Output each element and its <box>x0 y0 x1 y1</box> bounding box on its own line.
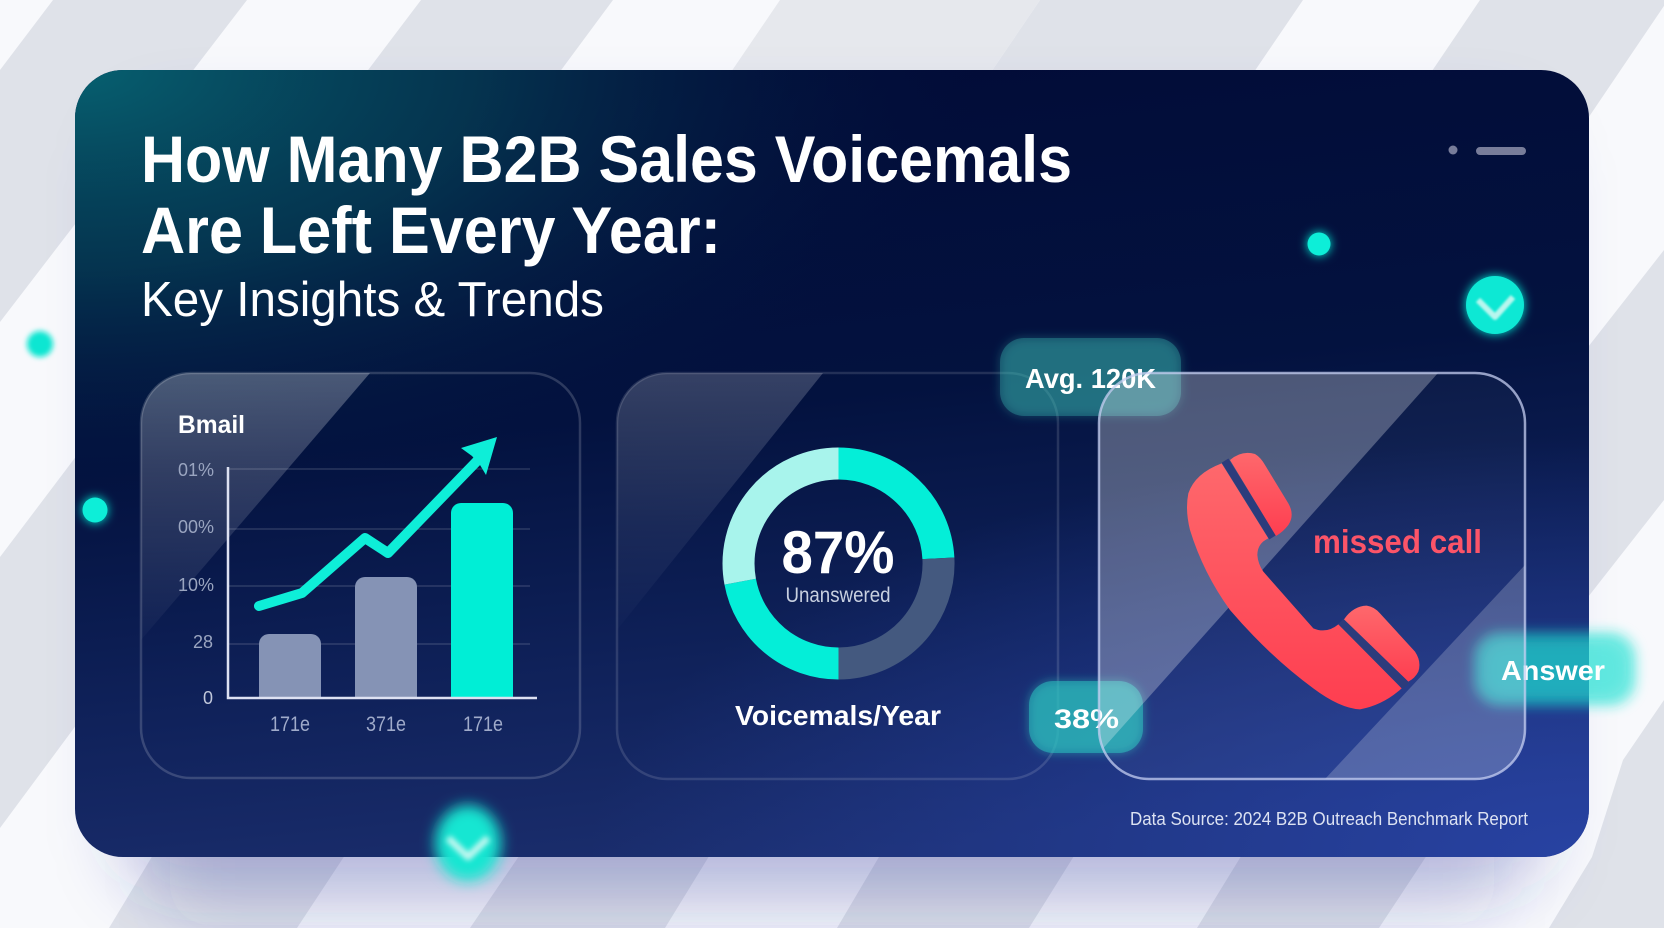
x axis labels: 371e <box>366 713 406 736</box>
panel: bar chart <box>141 373 580 778</box>
x axis labels: 171e <box>463 713 503 736</box>
glowing dot: left inside card <box>82 498 108 522</box>
y axis labels <box>178 460 214 708</box>
donut chart <box>739 463 939 664</box>
title: Are Left Every Year: <box>141 193 721 267</box>
panel caption: Voicemals/Year <box>735 700 941 731</box>
icon: glowing check badge bottom <box>435 805 501 881</box>
subtitle: Key Insights & Trends <box>141 273 604 327</box>
callout: 38 percent: 38% <box>1054 704 1119 734</box>
icon: glowing check badge upper right <box>1466 276 1524 334</box>
callout: 38 percent <box>1029 681 1143 753</box>
y axis labels: 10% <box>178 575 214 595</box>
glowing dot: upper right <box>1308 232 1330 256</box>
icon: red phone handset <box>1187 453 1419 709</box>
donut value: 87% <box>782 519 894 586</box>
y axis labels: 00% <box>178 517 214 537</box>
bars <box>259 503 513 698</box>
title <box>141 122 1072 267</box>
chart label: Bmail <box>178 411 245 439</box>
y axis labels: 01% <box>178 460 214 480</box>
grid lines <box>228 469 530 644</box>
axes <box>228 467 537 698</box>
panel: missed call <box>1099 373 1525 779</box>
y axis labels: 0 <box>203 688 213 708</box>
callout: answer: Answer <box>1501 655 1605 686</box>
window control decoration <box>1448 146 1526 155</box>
main dark card <box>75 70 1589 857</box>
glowing dot: left outside card <box>27 331 53 357</box>
missed call label: missed call <box>1313 523 1482 560</box>
x axis labels <box>270 713 503 736</box>
panel: donut <box>617 373 1058 779</box>
callout: average: Avg. 120K <box>1025 363 1156 394</box>
callout: answer <box>1474 632 1636 706</box>
trend arrow <box>259 437 497 606</box>
donut label: Unanswered <box>786 584 890 607</box>
callout: average <box>1000 338 1181 416</box>
title: How Many B2B Sales Voicemals <box>141 122 1072 196</box>
card shadow <box>120 120 1544 925</box>
y axis labels: 28 <box>193 632 213 652</box>
x axis labels: 171e <box>270 713 310 736</box>
data source note: Data Source: 2024 B2B Outreach Benchmark Report <box>1130 809 1528 829</box>
